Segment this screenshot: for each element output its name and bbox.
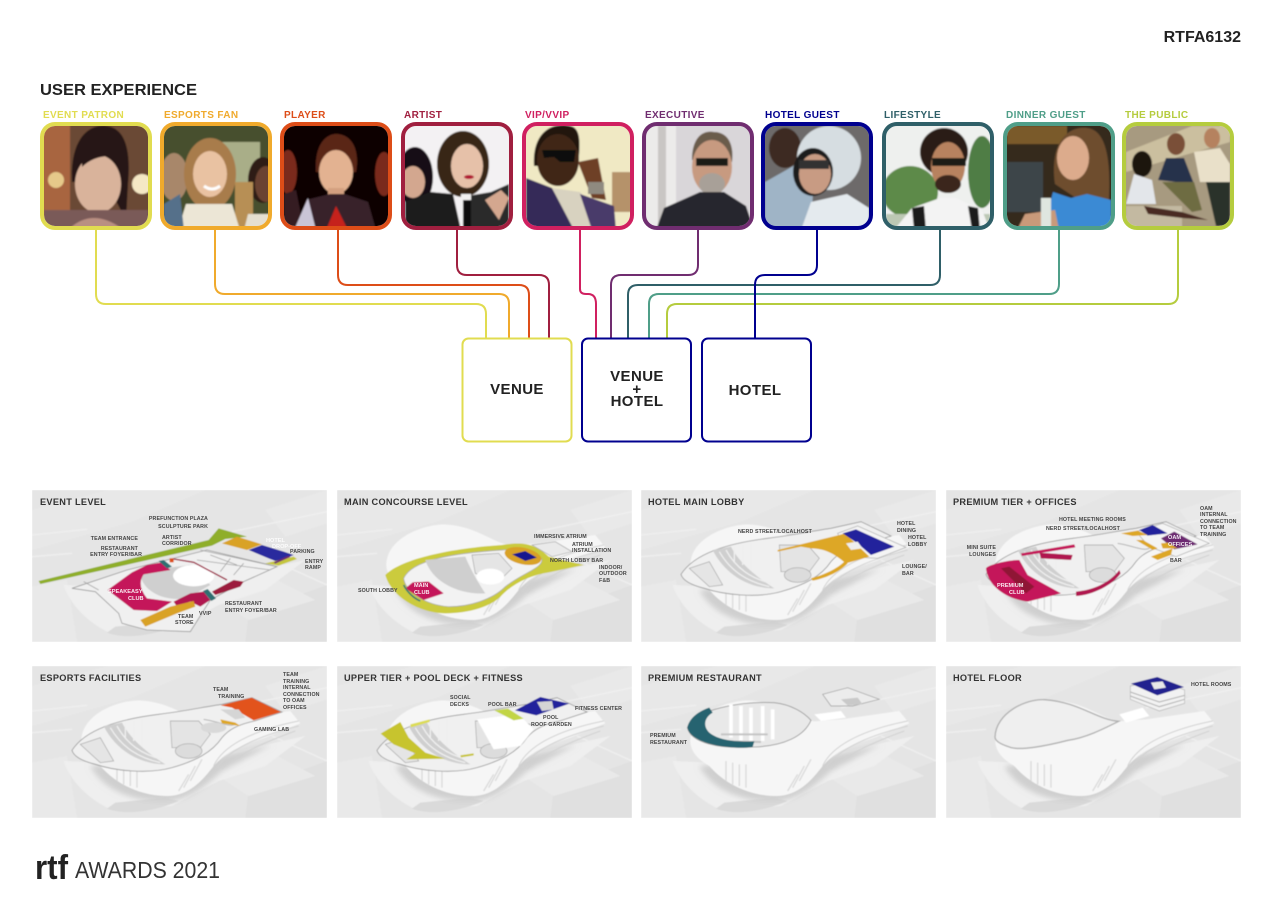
- logo: rtf awards 2021: AWARDS 2021: [75, 857, 220, 883]
- labels: upper tier + pool deck + fitness: ROOF GARDEN: [531, 722, 572, 728]
- labels: esports facilities: TRAINING: [218, 694, 244, 700]
- labels: event level: DROP-OFF: [272, 544, 302, 550]
- card: esports fan: [160, 122, 278, 230]
- box: venue + hotel: HOTEL: [611, 393, 663, 410]
- labels: premium tier + offices: TO TEAM: [1200, 525, 1225, 531]
- labels: main concourse level: [358, 534, 627, 596]
- labels: premium tier + offices: [967, 506, 1237, 596]
- box: venue + hotel: +: [632, 381, 642, 398]
- card: lifestyle: [882, 122, 996, 230]
- box: venue: [462, 338, 572, 442]
- card: artist: [397, 122, 513, 230]
- labels: main concourse level: NORTH LOBBY BAR: [550, 558, 603, 564]
- card: hotel guest: [761, 122, 873, 230]
- labels: premium tier + offices: INTERNAL: [1200, 512, 1228, 518]
- title: premium restaurant: PREMIUM RESTAURANT: [648, 673, 762, 683]
- panel: premium tier + offices: [946, 490, 1241, 642]
- labels: esports facilities: TEAM: [213, 687, 229, 693]
- title: premium tier + offices: PREMIUM TIER + OFFICES: [953, 497, 1077, 507]
- labels: event level: PREFUNCTION PLAZA: [149, 516, 208, 522]
- title: event level: EVENT LEVEL: [40, 497, 106, 507]
- labels: event level: SCULPTURE PARK: [158, 524, 208, 530]
- labels: upper tier + pool deck + fitness: POOL BAR: [488, 702, 517, 708]
- label: player: PLAYER: [284, 110, 326, 121]
- label: the public: THE PUBLIC: [1125, 110, 1188, 121]
- box: hotel: HOTEL: [729, 382, 781, 399]
- card: executive: [642, 122, 754, 230]
- labels: hotel main lobby: LOUNGE/: [902, 564, 927, 570]
- labels: event level: ENTRY FOYER/BAR: [225, 608, 277, 614]
- panel: esports facilities: [32, 666, 327, 818]
- labels: hotel main lobby: LOBBY: [908, 542, 927, 548]
- labels: esports facilities: OFFICES: [283, 705, 307, 711]
- labels: hotel main lobby: [738, 521, 927, 577]
- labels: premium restaurant: PREMIUM: [650, 733, 676, 739]
- labels: event level: STORE: [175, 620, 194, 626]
- label: event patron: EVENT PATRON: [43, 110, 124, 121]
- label: hotel guest: HOTEL GUEST: [765, 110, 840, 121]
- labels: event level: RAMP: [305, 565, 321, 571]
- labels: premium tier + offices: OFFICES: [1168, 542, 1193, 548]
- labels: premium tier + offices: CLUB: [1009, 590, 1025, 596]
- labels: hotel main lobby: HOTEL: [908, 535, 927, 541]
- labels: event level: ARTIST: [162, 535, 182, 541]
- label: dinner guest: DINNER GUEST: [1006, 110, 1086, 121]
- box: hotel: [702, 338, 811, 442]
- labels: upper tier + pool deck + fitness: FITNESS CENTER: [575, 706, 622, 712]
- labels: premium restaurant: RESTAURANT: [650, 740, 688, 746]
- panel: premium restaurant: [641, 666, 936, 818]
- labels: event level: [90, 516, 324, 626]
- labels: main concourse level: F&B: [599, 578, 610, 584]
- labels: main concourse level: MAIN: [414, 583, 428, 589]
- labels: premium tier + offices: MINI SUITE: [967, 545, 996, 551]
- title: main concourse level: MAIN CONCOURSE LEVEL: [344, 497, 468, 507]
- card: event patron: [40, 122, 152, 230]
- logo: rtf awards 2021: rtf: [35, 849, 69, 887]
- card: vip: [522, 122, 634, 230]
- title: hotel main lobby: HOTEL MAIN LOBBY: [648, 497, 745, 507]
- document code: RTFA6132: [1164, 29, 1241, 46]
- panel: event level: [32, 490, 327, 642]
- label: executive: EXECUTIVE: [645, 110, 705, 121]
- labels: esports facilities: INTERNAL: [283, 685, 311, 691]
- labels: esports facilities: TO OAM: [283, 698, 305, 704]
- panel: hotel main lobby: [641, 490, 936, 642]
- labels: esports facilities: CONNECTION: [283, 692, 320, 698]
- connector lines: [96, 230, 1178, 338]
- section title: USER EXPERIENCE: [40, 82, 197, 99]
- labels: event level: VVIP: [199, 611, 212, 617]
- labels: main concourse level: OUTDOOR: [599, 571, 627, 577]
- labels: main concourse level: SOUTH LOBBY: [358, 588, 398, 594]
- labels: premium restaurant: [650, 733, 688, 746]
- title: hotel floor: HOTEL FLOOR: [953, 673, 1022, 683]
- labels: main concourse level: ATRIUM: [572, 542, 593, 548]
- labels: premium tier + offices: HOTEL MEETING ROOMS: [1059, 517, 1126, 523]
- card: player: [279, 122, 393, 230]
- label: artist: ARTIST: [404, 110, 442, 121]
- labels: esports facilities: GAMING LAB: [254, 727, 289, 733]
- labels: event level: TEAM ENTRANCE: [91, 536, 138, 542]
- labels: hotel main lobby: NERD STREET/LOCALHOST: [738, 529, 813, 535]
- card: dinner guest: [1003, 122, 1115, 230]
- labels: upper tier + pool deck + fitness: [450, 695, 622, 728]
- card: the public: [1122, 122, 1234, 230]
- labels: upper tier + pool deck + fitness: POOL: [543, 715, 559, 721]
- box: venue + hotel: VENUE: [610, 368, 664, 385]
- label: lifestyle: LIFESTYLE: [884, 110, 941, 121]
- labels: main concourse level: IMMERSIVE ATRIUM: [534, 534, 587, 540]
- labels: premium tier + offices: PREMIUM: [997, 583, 1024, 589]
- labels: upper tier + pool deck + fitness: SOCIAL: [450, 695, 471, 701]
- box: venue: VENUE: [490, 381, 544, 398]
- labels: event level: TEAM: [178, 614, 194, 620]
- labels: premium tier + offices: BAR: [1170, 558, 1182, 564]
- labels: esports facilities: TEAM: [283, 672, 299, 678]
- label: hotel rooms: HOTEL ROOMS: [1191, 682, 1232, 688]
- labels: premium tier + offices: TRAINING: [1200, 532, 1226, 538]
- labels: main concourse level: INDOOR/: [599, 565, 623, 571]
- box: venue + hotel: [582, 338, 691, 442]
- labels: premium tier + offices: LOUNGES: [969, 552, 996, 558]
- labels: event level: ENTRY: [305, 559, 324, 565]
- label: esports fan: ESPORTS FAN: [164, 110, 238, 121]
- panel: hotel floor: [946, 666, 1241, 818]
- labels: esports facilities: TRAINING: [283, 679, 309, 685]
- labels: esports facilities: [213, 672, 320, 733]
- labels: main concourse level: INSTALLATION: [572, 548, 611, 554]
- labels: premium tier + offices: OAM: [1200, 506, 1213, 512]
- labels: event level: HOTEL: [266, 538, 286, 544]
- labels: upper tier + pool deck + fitness: DECKS: [450, 702, 469, 708]
- labels: event level: RESTAURANT: [225, 601, 263, 607]
- labels: hotel main lobby: HOTEL: [897, 521, 916, 527]
- title: upper tier + pool deck + fitness: UPPER TIER + POOL DECK + FITNESS: [344, 673, 523, 683]
- panel: upper tier + pool deck + fitness: [337, 666, 632, 818]
- title: esports facilities: ESPORTS FACILITIES: [40, 673, 141, 683]
- labels: event level: ENTRY FOYER/BAR: [90, 552, 142, 558]
- labels: event level: SPEAKEASY: [108, 589, 143, 595]
- labels: event level: PARKING: [290, 549, 315, 555]
- panel: main concourse level: [337, 490, 632, 642]
- label: vip: VIP/VVIP: [525, 110, 570, 121]
- labels: premium tier + offices: OAM: [1168, 535, 1181, 541]
- logo: rtf awards 2021: [35, 849, 220, 887]
- labels: event level: CORRIDOR: [162, 541, 192, 547]
- labels: main concourse level: CLUB: [414, 590, 430, 596]
- labels: event level: RESTAURANT: [101, 546, 139, 552]
- labels: hotel main lobby: BAR: [902, 571, 914, 577]
- labels: event level: CLUB: [128, 596, 144, 602]
- labels: hotel main lobby: DINING: [897, 528, 916, 534]
- labels: premium tier + offices: CONNECTION: [1200, 519, 1237, 525]
- labels: premium tier + offices: NERD STREET/LOCALHOST: [1046, 526, 1121, 532]
